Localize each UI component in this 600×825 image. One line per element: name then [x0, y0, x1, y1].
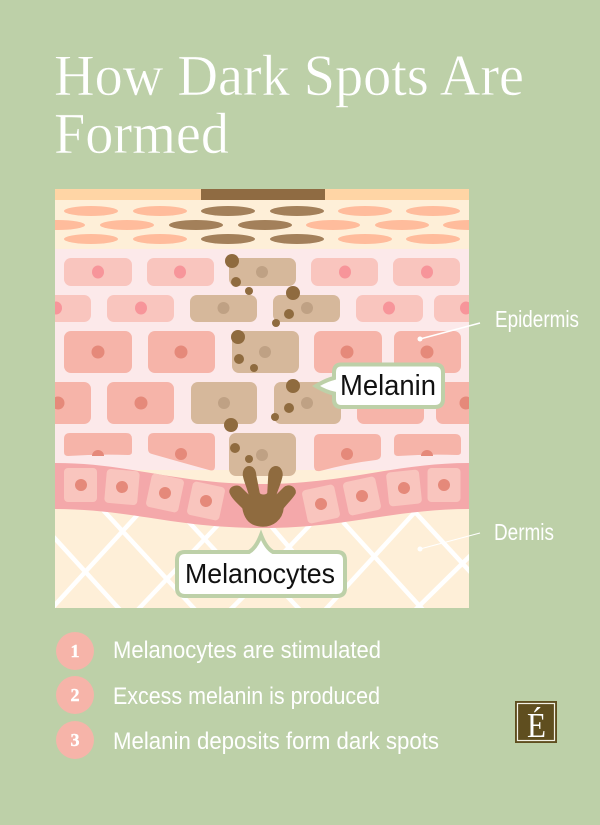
basal cells — [64, 468, 460, 524]
step 3: 3 — [70, 730, 80, 750]
step 1 — [56, 632, 381, 670]
label: Epidermis: Epidermis — [495, 306, 579, 332]
step 2: Excess melanin is produced — [113, 683, 380, 710]
upper cell nuclei — [50, 266, 472, 314]
lower cell nuclei — [52, 346, 472, 460]
skin cross-section diagram — [55, 189, 469, 608]
melanocyte — [230, 467, 295, 526]
step 1: 1 — [70, 641, 80, 661]
lower epidermis cells — [55, 331, 469, 472]
step 3 — [56, 721, 439, 759]
epidermis background — [55, 249, 469, 470]
stratum corneum flakes — [55, 206, 469, 244]
dermis pointer dot — [418, 546, 422, 552]
logo — [515, 701, 557, 745]
step 1: Melanocytes are stimulated — [113, 637, 381, 664]
step 2 — [56, 676, 380, 714]
title: How Dark Spots Are — [54, 43, 524, 108]
dermis leader line — [420, 533, 480, 549]
step 3: Melanin deposits form dark spots — [113, 728, 439, 755]
logo: É — [527, 706, 546, 745]
callout: Melanocytes — [177, 535, 345, 596]
title — [54, 43, 524, 166]
melanin-filled cells — [190, 258, 341, 476]
callout: Melanin: Melanin — [340, 370, 436, 402]
upper epidermis cells — [55, 258, 469, 322]
epidermis pointer dot — [418, 336, 422, 342]
callout: Melanin — [316, 364, 443, 407]
skin surface band with dark spot — [55, 189, 469, 200]
callout: Melanocytes: Melanocytes — [185, 558, 335, 589]
basal layer band — [55, 463, 469, 528]
dermis lattice — [55, 512, 469, 608]
step 2: 2 — [70, 685, 80, 705]
title: Formed — [54, 101, 229, 166]
melanin granules — [224, 254, 300, 463]
epidermis leader line — [420, 323, 480, 339]
label: Dermis: Dermis — [494, 519, 554, 545]
pigmented flakes — [169, 206, 324, 244]
melanin cell nuclei — [218, 266, 313, 461]
